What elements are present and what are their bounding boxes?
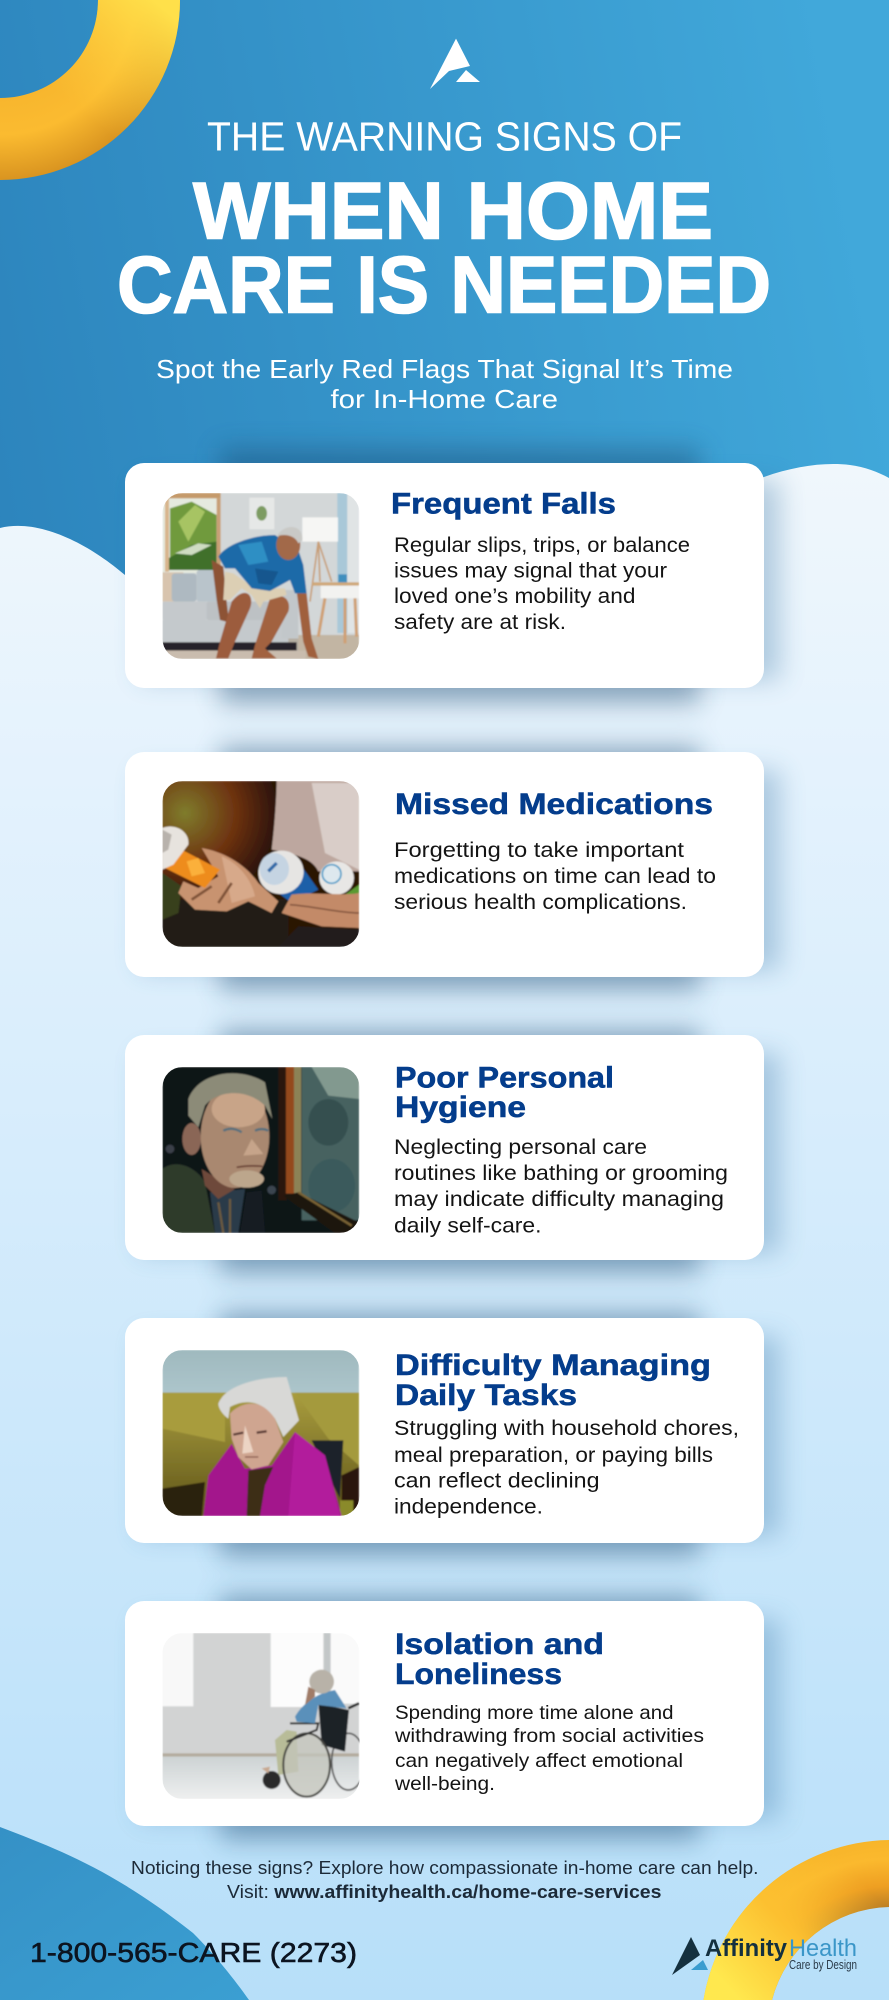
body text: [394, 533, 690, 634]
subtitle: [156, 354, 733, 414]
heading: Poor Personal: [395, 1062, 614, 1094]
body text: meal preparation, or paying bills: [394, 1443, 713, 1467]
panel: missed medications: [125, 752, 764, 977]
card shadows: [220, 448, 700, 1840]
body text: serious health complications.: [394, 890, 687, 914]
subtitle: for In-Home Care: [330, 384, 558, 414]
heading: Daily Tasks: [395, 1379, 577, 1412]
decoration: bottom-right yellow ring: [704, 1840, 889, 2000]
panel: isolation and loneliness: [125, 1601, 764, 1826]
background: light wave body: [0, 464, 889, 2000]
body text: [394, 838, 716, 914]
photo: man stooping in living room: [162, 493, 359, 659]
heading: Hygiene: [395, 1091, 526, 1124]
logo wordmark: Affinity: [705, 1935, 788, 1962]
title: main line two: CARE IS NEEDED: [117, 240, 771, 330]
heading: Isolation and: [395, 1628, 604, 1661]
logo mark: [672, 1937, 708, 1975]
logo tagline: Care by Design: [789, 1958, 857, 1972]
photo: elderly man at window: [162, 1067, 359, 1233]
logo: white mark: [430, 39, 480, 89]
body text: well-being.: [394, 1773, 495, 1795]
card side shadows: [140, 480, 780, 1819]
heading: [395, 1349, 711, 1412]
body text: issues may signal that your: [394, 558, 667, 582]
decoration: bottom-left blue blob: [0, 1827, 249, 2000]
decoration: top-left yellow ring: [0, 0, 180, 180]
heading: [395, 1628, 604, 1691]
body text: can negatively affect emotional: [395, 1750, 683, 1772]
footer call to action: Noticing these signs? Explore how compassionate in-home care can help.: [131, 1857, 758, 1878]
body text: Struggling with household chores,: [394, 1416, 739, 1440]
body text: loved one’s mobility and: [394, 584, 636, 608]
body text: withdrawing from social activities: [394, 1725, 704, 1747]
subtitle: Spot the Early Red Flags That Signal It’s Time: [156, 354, 733, 384]
body text: Spending more time alone and: [395, 1702, 674, 1724]
body text: medications on time can lead to: [394, 864, 716, 888]
heading: Loneliness: [395, 1658, 562, 1691]
heading: Frequent Falls: [391, 488, 616, 520]
body text: daily self-care.: [394, 1214, 542, 1238]
body text: safety are at risk.: [394, 610, 566, 634]
title: eyebrow line: THE WARNING SIGNS OF: [207, 114, 682, 160]
title: main line one: WHEN HOME: [193, 166, 713, 256]
heading: [395, 1062, 614, 1124]
body text: [394, 1702, 704, 1795]
photo: person in wheelchair by window: [162, 1633, 365, 1799]
body text: [394, 1416, 739, 1518]
photo: elderly woman on yellow sofa: [162, 1350, 359, 1516]
body text: Forgetting to take important: [394, 838, 684, 862]
photo: hands holding pill bottles: [162, 781, 359, 947]
body text: independence.: [394, 1494, 543, 1518]
phone number: 1-800-565-CARE (2273): [30, 1937, 357, 1968]
footer call to action: Visit: www.affinityhealth.ca/home-care-services: [227, 1881, 662, 1902]
body text: [394, 1135, 728, 1238]
logo: Affinity Health: [672, 1935, 857, 1975]
panel: frequent falls: [125, 463, 764, 688]
body text: Neglecting personal care: [394, 1135, 647, 1159]
panel: poor personal hygiene: [125, 1035, 764, 1260]
title: [117, 114, 771, 330]
body text: routines like bathing or grooming: [394, 1161, 728, 1185]
heading: Missed Medications: [395, 788, 713, 821]
logo: Affinity Health: Health: [789, 1935, 857, 1962]
footer call to action: [131, 1857, 758, 1902]
heading: Difficulty Managing: [395, 1349, 711, 1382]
panel: difficulty managing daily tasks: [125, 1318, 764, 1543]
body text: may indicate difficulty managing: [394, 1187, 724, 1211]
body text: Regular slips, trips, or balance: [394, 533, 690, 557]
body text: can reflect declining: [394, 1468, 600, 1492]
